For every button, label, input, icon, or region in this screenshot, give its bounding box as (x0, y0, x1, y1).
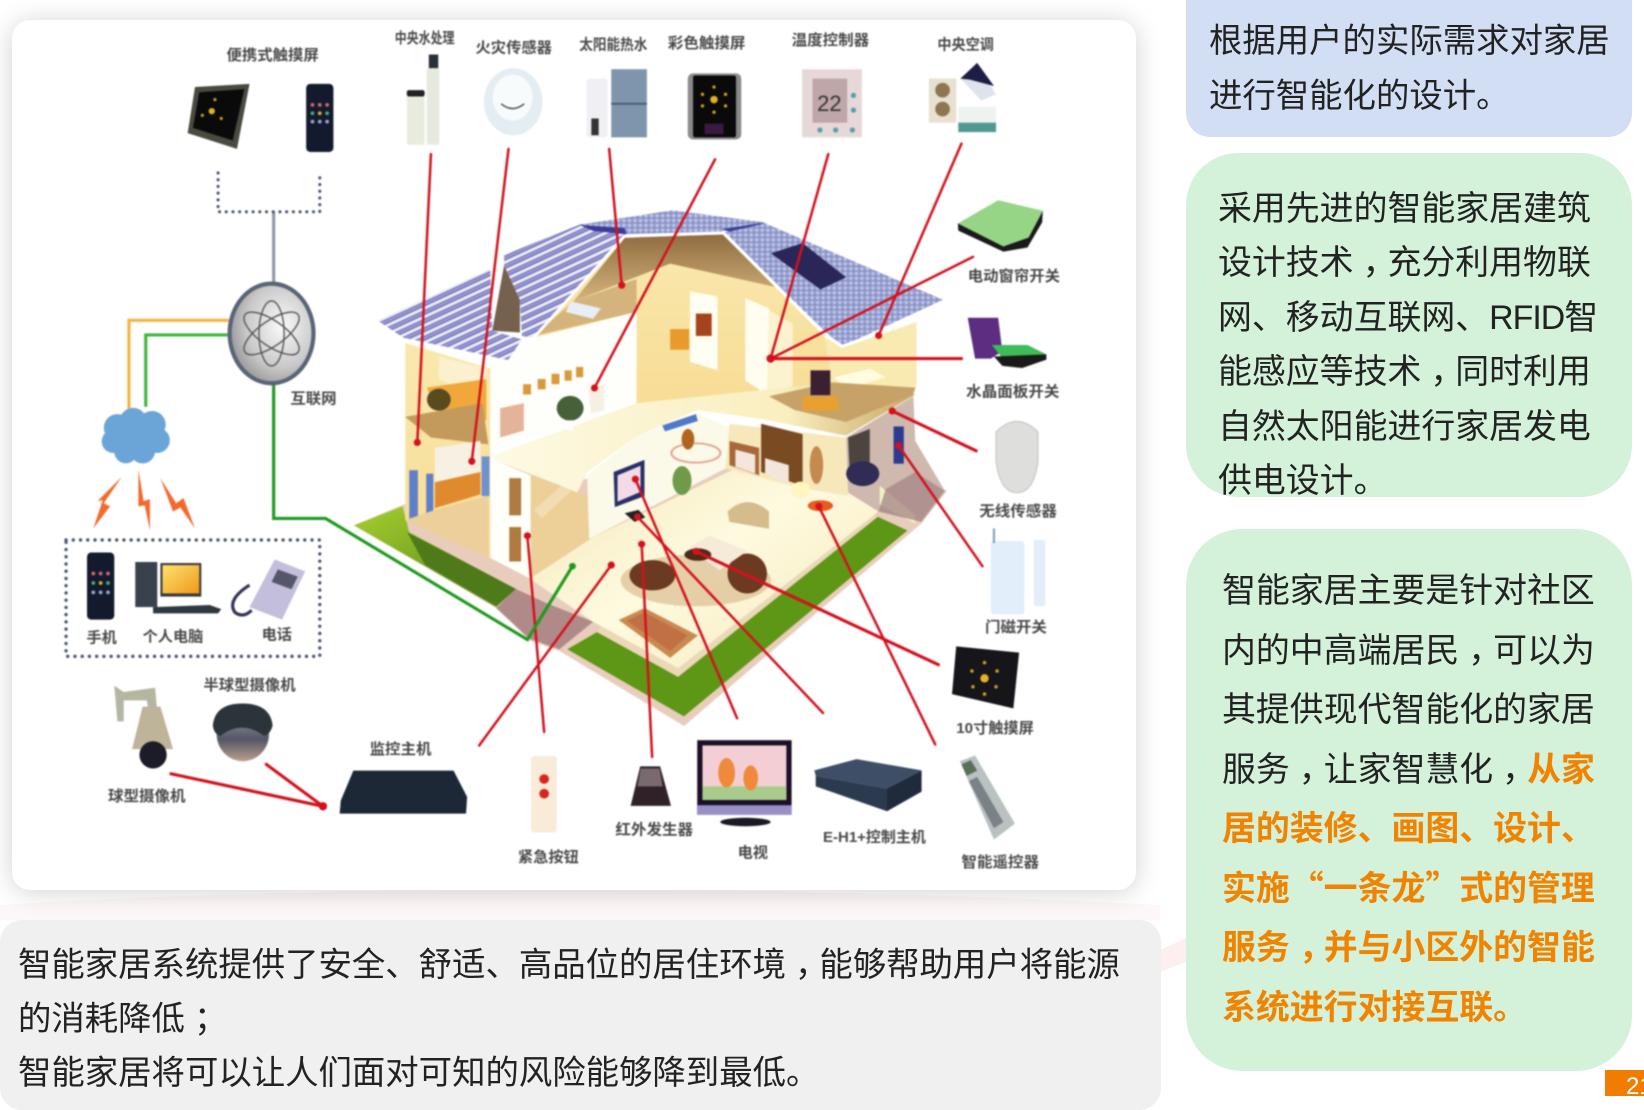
device labels: 中央水处理 (395, 29, 455, 47)
left rooms (405, 343, 490, 558)
icon: thermostat: 22 (817, 91, 842, 116)
device labels: 手机 (86, 630, 117, 647)
icon: solar water heater (587, 69, 647, 137)
icon: E-H1+ control host (814, 759, 922, 811)
icon: emergency button (531, 756, 557, 832)
icon: mobile phone (306, 84, 333, 152)
device labels: 半球型摄像机 (203, 676, 296, 694)
panel: bottom summary (0, 920, 1161, 1110)
text: technology note: 网、移动互联网、RFID智 (1218, 299, 1598, 337)
panel: design note (1186, 0, 1632, 137)
device labels: 中央空调 (937, 35, 994, 53)
device labels: 火灾传感器 (475, 38, 552, 56)
icon: smart remote (960, 756, 1015, 840)
text: summary paragraph: 智能家居系统提供了安全、舒适、高品位的居住环境 ，能够帮助用户将能源 (18, 947, 1120, 984)
upper floor (490, 234, 916, 493)
device labels: 电话 (262, 627, 292, 644)
device labels (86, 29, 1060, 871)
dotted bracket: portable touch screens (218, 173, 320, 212)
device labels: 个人电脑 (143, 628, 203, 646)
device labels: 监控主机 (370, 740, 432, 758)
ground and lawn (354, 441, 947, 726)
icon: ball camera (114, 686, 173, 769)
text: target residents note (1222, 572, 1595, 1028)
device labels: 球型摄像机 (108, 787, 186, 805)
text: summary paragraph: 智能家居将可以让人们面对可知的风险能够降到最低。 (18, 1055, 819, 1092)
icon: cloud (102, 408, 170, 463)
text: target residents note: 居的装修、画图、设计、 (1222, 801, 1595, 850)
text: technology note: 设计技术 ，充分利用物联 (1218, 244, 1591, 282)
device labels: 互联网 (290, 391, 337, 408)
icon: dome camera (213, 704, 273, 761)
icon: wireless sensor (996, 421, 1038, 493)
text: technology note: 能感应等技术 ，同时利用 (1218, 353, 1591, 391)
device labels: E-H1+控制主机 (823, 828, 926, 846)
device labels: 温度控制器 (792, 31, 870, 49)
device labels: 红外发生器 (615, 821, 693, 839)
text: target residents note: 内的中高端居民 ，可以为 (1222, 632, 1595, 670)
device labels: 电视 (738, 845, 768, 862)
device labels: 水晶面板开关 (966, 382, 1060, 400)
icon: television (697, 740, 792, 826)
icon: infrared emitter (631, 766, 671, 806)
text: design note: 根据用户的实际需求对家居 (1209, 23, 1610, 60)
panel: diagram card (12, 20, 1136, 890)
device labels: 便携式触摸屏 (226, 46, 319, 64)
panel: technology note (1186, 153, 1632, 497)
icon: water treatment (407, 55, 439, 145)
icon: personal computer (135, 562, 221, 613)
icon: colour touch screen (688, 73, 741, 139)
device labels: 太阳能热水 (579, 35, 648, 53)
text: summary paragraph (18, 947, 1120, 1092)
icon: crystal panel switch (968, 318, 1046, 368)
text: target residents note: 实施“一条龙”式的管理 (1222, 860, 1595, 910)
page number badge (1605, 1070, 1644, 1096)
device labels: 门磁开关 (985, 618, 1047, 636)
panel: target residents note (1186, 529, 1632, 1071)
icon: internet globe (230, 284, 313, 383)
text: target residents note: 服务 ，让家智慧化 ，从家 (1222, 742, 1595, 790)
icon: lightning bolts (93, 470, 195, 531)
text: target residents note: 系统进行对接互联。 (1222, 980, 1527, 1028)
icon: phone in user devices (87, 553, 114, 620)
text: summary paragraph: 的消耗降低 ； (18, 1001, 227, 1038)
text: design note (1209, 23, 1610, 115)
network connection lines (129, 212, 576, 640)
text: technology note: 自然太阳能进行家居发电 (1218, 408, 1591, 446)
icon: 10-inch touch screen (952, 646, 1019, 708)
icon: curtain switch (958, 200, 1043, 252)
red connector lines (171, 144, 982, 810)
text: target residents note: 服务 ，并与小区外的智能 (1222, 920, 1595, 969)
icon: desk telephone (233, 559, 305, 620)
house illustration (354, 210, 947, 726)
dotted box: user devices (66, 540, 320, 656)
icon: central air conditioner (929, 63, 996, 132)
text: technology note: 采用先进的智能家居建筑 (1218, 190, 1591, 228)
device labels: 电动窗帘开关 (968, 267, 1060, 285)
stairs and pillar (490, 458, 589, 579)
text: target residents note: 智能家居主要是针对社区 (1222, 572, 1595, 610)
icon: thermostat (802, 69, 862, 137)
icon: tablet (188, 84, 250, 149)
icon: smoke sensor (484, 68, 543, 135)
ground floor (530, 413, 879, 668)
roof (378, 210, 943, 360)
icon: door magnet switch (991, 528, 1045, 614)
garage (846, 396, 945, 524)
device labels: 紧急按钮 (518, 848, 579, 866)
device labels: 无线传感器 (979, 502, 1057, 520)
device labels: 彩色触摸屏 (668, 34, 746, 52)
text: technology note (1218, 190, 1598, 497)
text: design note: 进行智能化的设计。 (1209, 78, 1510, 115)
icon: monitoring host (340, 771, 467, 814)
device labels: 10寸触摸屏 (956, 719, 1034, 737)
text: target residents note: 其提供现代智能化的家居 (1222, 691, 1595, 729)
device labels: 智能遥控器 (961, 853, 1039, 871)
